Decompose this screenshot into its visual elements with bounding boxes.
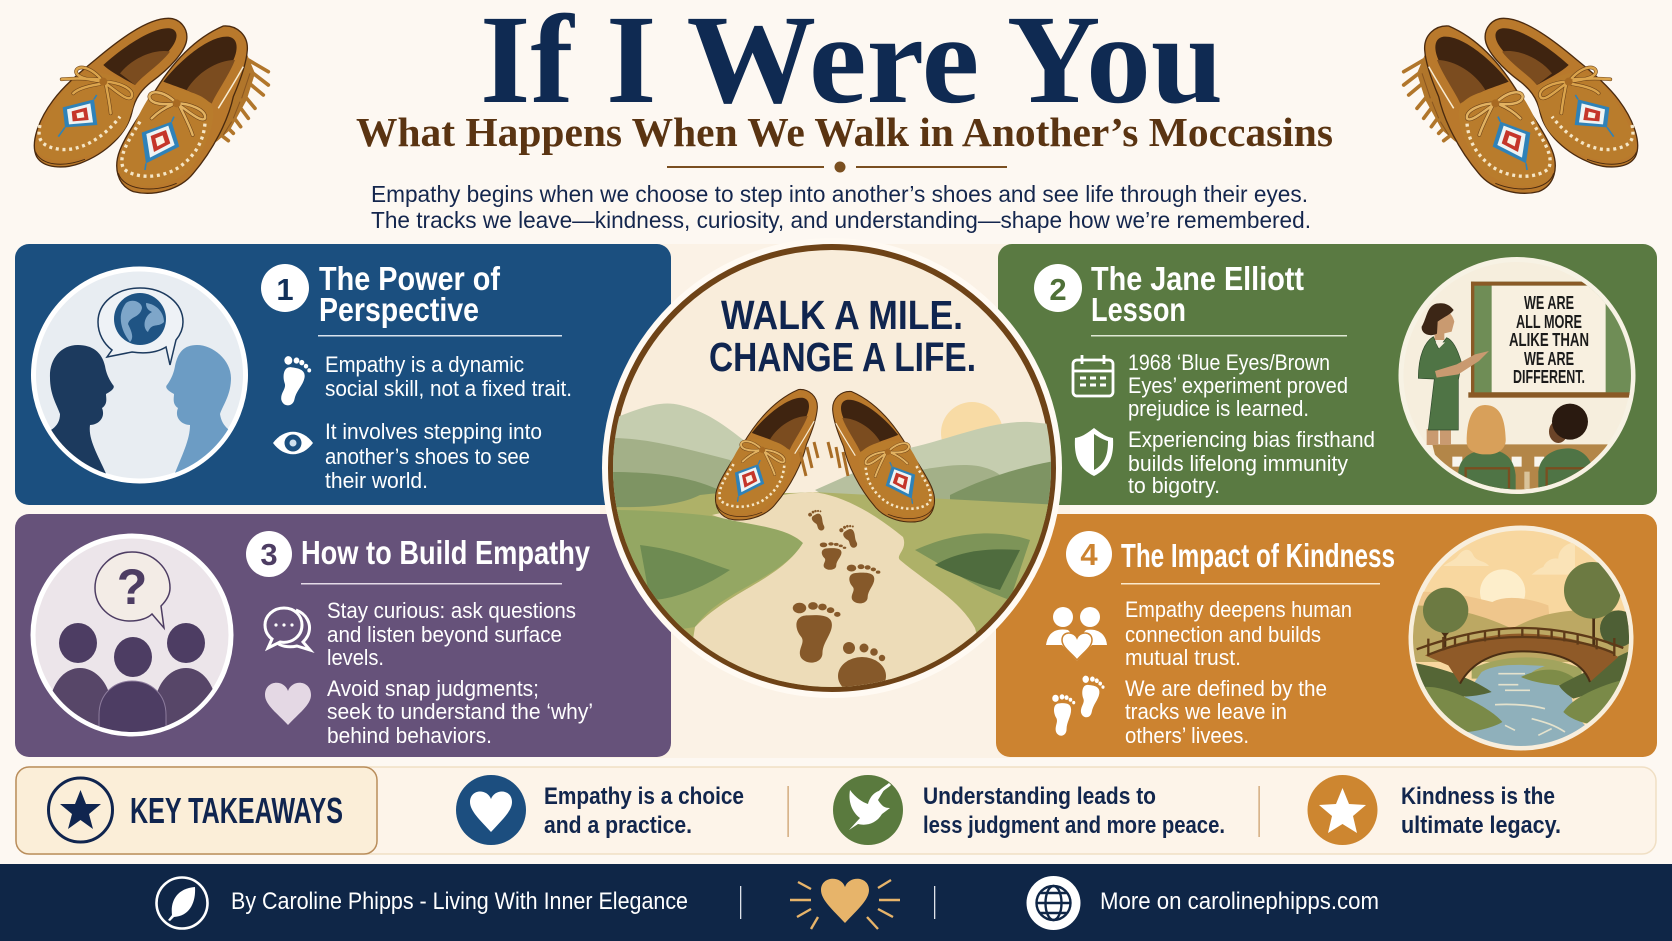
illustration: group with question: ? xyxy=(117,559,147,615)
badge 1: 1 xyxy=(276,272,294,307)
heading: The Power of xyxy=(319,260,501,297)
text: stay curious: and listen beyond surface xyxy=(327,622,562,647)
text: experiencing bias: Experiencing bias firsthand xyxy=(1128,427,1375,452)
panel: 4 the impact of kindness xyxy=(996,514,1657,762)
takeaway 3: ultimate legacy. xyxy=(1401,812,1561,839)
moccasin pair center xyxy=(715,389,935,522)
badge 3 xyxy=(246,531,292,577)
heading: Lesson xyxy=(1091,291,1186,328)
icon: moccasin pair right xyxy=(1404,18,1638,193)
text: stepping into shoes: their world. xyxy=(325,468,428,493)
takeaway 2 xyxy=(833,775,1225,845)
center medallion xyxy=(602,238,1062,720)
text: avoid snap judgments: Avoid snap judgments; xyxy=(327,676,539,701)
intro text: Empathy begins when we choose to step into another’s shoes and see life through their eyes. xyxy=(371,181,1308,207)
text: 1968 experiment: Eyes’ experiment proved xyxy=(1128,373,1348,398)
sign text xyxy=(1509,293,1589,387)
text: human connection: Empathy deepens human xyxy=(1125,597,1352,622)
text: stepping into shoes xyxy=(325,419,542,493)
text: experiencing bias: builds lifelong immunity xyxy=(1128,451,1348,476)
illustration: bridge landscape xyxy=(1408,528,1637,762)
text: human connection: connection and builds xyxy=(1125,622,1321,647)
key takeaways label box xyxy=(16,767,377,854)
panel: 2 the jane elliott lesson xyxy=(998,244,1657,505)
text: avoid snap judgments: behind behaviors. xyxy=(327,723,492,748)
heading: The Impact of Kindness xyxy=(1121,537,1395,574)
key takeaways label box: KEY TAKEAWAYS xyxy=(130,790,343,831)
sign text: ALL MORE xyxy=(1516,312,1582,332)
badge 4: 4 xyxy=(1080,537,1098,572)
text: avoid snap judgments xyxy=(327,676,593,748)
takeaway 1: Empathy is a choice xyxy=(544,783,744,810)
author credit: By Caroline Phipps - Living With Inner Elegance xyxy=(231,888,688,915)
icon: heart xyxy=(265,683,311,725)
badge 2: 2 xyxy=(1049,272,1067,307)
text: tracks we leave: others’ livees. xyxy=(1125,723,1249,748)
text: human connection: mutual trust. xyxy=(1125,645,1241,670)
heading xyxy=(1091,260,1304,328)
text: 1968 experiment: prejudice is learned. xyxy=(1128,396,1309,421)
takeaway 1: and a practice. xyxy=(544,812,692,839)
heading: Perspective xyxy=(319,291,479,328)
badge 3: 3 xyxy=(260,537,278,572)
badge 2 xyxy=(1034,264,1082,312)
intro text xyxy=(371,181,1311,233)
sign text: WE ARE xyxy=(1524,293,1574,313)
panel: key takeaways xyxy=(16,767,1656,854)
takeaway 3 xyxy=(1308,775,1561,845)
text: stay curious xyxy=(327,598,576,670)
slogan: CHANGE A LIFE. xyxy=(709,334,976,380)
subtitle: What Happens When We Walk in Another’s Moccasins xyxy=(356,109,1333,155)
icon: eye xyxy=(273,432,313,454)
text: stepping into shoes: another’s shoes to see xyxy=(325,444,530,469)
icon: shield xyxy=(1075,428,1113,476)
text: 1968 experiment xyxy=(1128,350,1348,421)
icon: moccasin pair left xyxy=(34,18,268,193)
ornament divider xyxy=(667,162,1007,172)
text: dynamic skill xyxy=(325,352,572,401)
heading xyxy=(319,260,501,328)
heading: How to Build Empathy xyxy=(301,534,591,571)
text: stepping into shoes: It involves stepping into xyxy=(325,419,542,444)
landscape xyxy=(613,402,1051,687)
takeaway 2: less judgment and more peace. xyxy=(923,812,1225,839)
text: dynamic skill: social skill, not a fixed trait. xyxy=(325,376,572,401)
text: stay curious: Stay curious: ask questions xyxy=(327,598,576,623)
text: dynamic skill: Empathy is a dynamic xyxy=(325,352,524,377)
sign text: WE ARE xyxy=(1524,349,1574,369)
badge 1 xyxy=(261,264,309,312)
text: 1968 experiment: 1968 ‘Blue Eyes/Brown xyxy=(1128,350,1330,375)
badge 4 xyxy=(1066,531,1112,577)
intro text: The tracks we leave—kindness, curiosity, and understanding—shape how we’re remembered. xyxy=(371,207,1311,233)
takeaway 1 xyxy=(456,775,744,845)
icon: calendar xyxy=(1073,355,1113,396)
sign text: DIFFERENT. xyxy=(1513,367,1585,387)
illustration: classroom xyxy=(1401,260,1635,495)
icon: two footprints xyxy=(1052,675,1106,736)
icon: heart with rays xyxy=(790,879,900,929)
text: tracks we leave: We are defined by the xyxy=(1125,676,1327,701)
heading: The Jane Elliott xyxy=(1091,260,1304,297)
text: human connection xyxy=(1125,597,1352,670)
slogan: WALK A MILE. xyxy=(721,292,963,338)
text: tracks we leave xyxy=(1125,676,1327,748)
panel: 3 how to build empathy xyxy=(15,514,671,757)
takeaway 2: Understanding leads to xyxy=(923,783,1156,810)
slogan xyxy=(709,292,976,380)
text: experiencing bias: to bigotry. xyxy=(1128,473,1220,498)
text: experiencing bias xyxy=(1128,427,1375,498)
text: stay curious: levels. xyxy=(327,645,384,670)
takeaway 3: Kindness is the xyxy=(1401,783,1555,810)
panel: 1 the power of perspective xyxy=(15,244,671,505)
illustration: group with question xyxy=(33,536,231,740)
icon: footprint xyxy=(276,355,313,409)
icon: people with heart xyxy=(1046,607,1107,661)
website credit: More on carolinephipps.com xyxy=(1100,888,1379,915)
text: avoid snap judgments: seek to understand the ‘why’ xyxy=(327,699,593,724)
text: tracks we leave: tracks we leave in xyxy=(1125,699,1287,724)
sign text: ALIKE THAN xyxy=(1509,330,1589,350)
icon: feather xyxy=(156,878,208,928)
footer xyxy=(0,864,1672,941)
icon: globe xyxy=(1026,876,1080,930)
illustration: two silhouettes and globe xyxy=(34,269,246,500)
icon: chat bubbles xyxy=(265,608,310,650)
